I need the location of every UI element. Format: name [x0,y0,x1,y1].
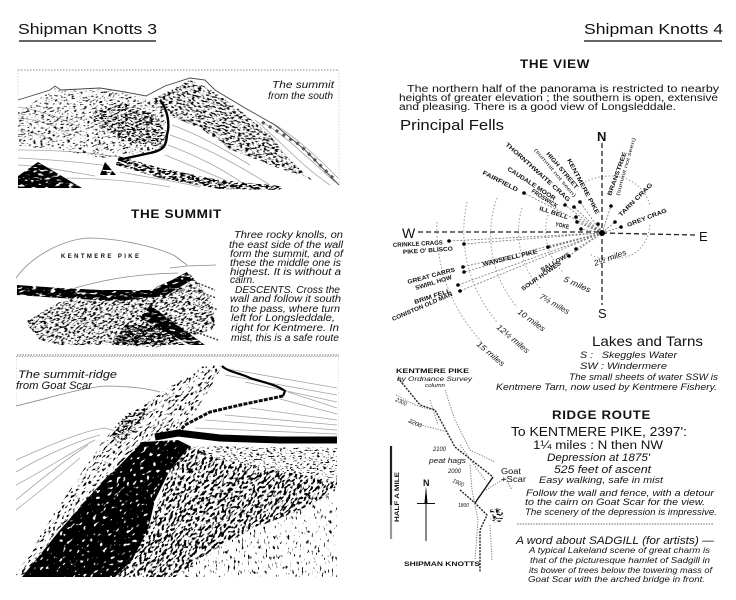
route line [398,378,493,572]
page: right [391,21,723,584]
fell labels [391,137,668,323]
fell labels: (summit not seen) [615,137,638,197]
text block: summit description: left for Longsleddale, [231,313,335,324]
distance labels: 12½ miles [495,323,531,355]
map labels: column [425,383,445,389]
compass axes: W [402,225,416,241]
callout: a word about Sadgill: Goat Scar with the arched bridge in front. [528,574,705,584]
text block: lakes list: The small sheets of water SSW is [569,372,718,383]
map labels: Goat [501,467,522,476]
text block: ridge route details: to the cairn on Goat Scar for the view. [525,497,705,508]
fell labels: FAIRFIELD [481,170,519,194]
text block: ridge route details: Depression at 1875' [547,452,651,464]
map labels: 2100 [432,447,447,453]
map: ridge route [391,369,526,572]
fell labels: FROSWICK [530,189,559,210]
text block: summit description: mist, this is a safe route [231,333,339,344]
map labels: 1800 [458,503,469,509]
heading: The View: THE VIEW [520,57,590,71]
callout: a word about Sadgill: A typical Lakeland scene of great charm is [528,545,711,555]
text block: summit description: Three rocky knolls, on [234,230,343,241]
scale bar [391,446,401,539]
text block: lakes list: S : Skeggles Water [580,350,678,361]
caption: the summit-ridge from Goat Scar: The summit-ridge [18,369,117,381]
text block: ridge route details: Easy walking, safe in mist [539,475,663,486]
text block: summit description: DESCENTS. Cross the [235,285,340,296]
distance labels: 7½ miles [538,292,571,316]
fell labels: (summit not seen) [532,147,577,199]
compass axes: E [699,229,708,244]
fell labels: CAUDALE MOOR [506,167,557,203]
distance labels [475,248,628,368]
chart: radial view diagram [391,129,708,368]
text block: summit description: the east side of the wall [229,240,344,251]
compass axes: S [598,306,607,321]
text block: lakes list: Kentmere Tarn, now used by Kentmere Fishery. [496,382,717,393]
illustration: summit knoll with Kentmere Pike [16,238,339,356]
text block: ridge route details [511,424,717,518]
sight lines [449,193,621,291]
caption: the summit from the south [268,80,335,102]
text block: ridge route details: Follow the wall and fence, with a detour [526,488,715,499]
fell labels: TARN CRAG [618,182,655,218]
fell labels: BRIM FELL [414,288,452,306]
fell labels: SOUR HOWES [521,261,563,293]
fell labels: HIGH STREET [544,151,579,191]
heading: The Summit: THE SUMMIT [131,207,222,221]
fell labels: BRANSTREE [607,151,629,197]
fell labels: GREY CRAG [627,208,668,229]
caption: the summit-ridge from Goat Scar [16,369,117,392]
fell labels: GREAT CARRS [407,267,456,286]
text block: summit description: right for Kentmere. In [231,323,339,334]
map labels: 2000 [447,469,462,475]
heading: Principal Fells: Principal Fells [400,117,504,134]
callout: a word about Sadgill: its bower of trees below the towering mass of [529,565,714,575]
page: left [0,21,344,577]
map labels: peat hags [428,458,467,465]
heading: Lakes and Tarns: Lakes and Tarns [592,333,703,349]
compass axes: N [597,129,606,144]
fell labels: CRINKLE CRAGS [393,240,443,249]
text block: summit description: wall and follow it south [230,294,341,305]
north arrow [417,478,435,541]
distance labels: 5 miles [562,275,592,295]
text block: lakes list [496,350,718,393]
text block: view description: and pleasing. There is a good view of Longsleddale. [399,102,676,113]
fell labels: ILL BELL [538,206,569,221]
text block: ridge route details: 1¼ miles : N then NW [533,440,663,452]
heading: Ridge Route: RIDGE ROUTE [552,408,651,422]
label: Kentmere Pike: KENTMERE PIKE [61,254,139,260]
fell labels: WANSFELL PIKE [482,250,538,268]
callout: a word about Sadgill: A word about SADGILL (for artists) — [515,535,715,547]
text block: view description [399,84,719,113]
scale bar: HALF A MILE [395,472,401,522]
illustration: the summit-ridge from Goat Scar [16,356,339,577]
map labels: KENTMERE PIKE [396,369,469,375]
text block: summit description: to the pass, where turn [230,304,340,315]
compass axes [402,129,708,321]
map labels: 2300 [393,397,408,408]
heading: Shipman Knotts 4: Shipman Knotts 4 [584,21,723,38]
text block: ridge route details: 525 feet of ascent [554,464,652,476]
text block: lakes list: SW : Windermere [580,361,667,372]
caption: the summit from the south: The summit [272,80,335,91]
callout: a word about Sadgill: that of the picturesque hamlet of Sadgill in [530,555,710,565]
heading: Shipman Knotts 3: Shipman Knotts 3 [18,21,157,38]
text block: ridge route details: The scenery of the depression is impressive. [525,507,717,518]
map labels: 2200 [406,418,423,430]
fell markers [447,191,623,293]
map labels: +Scar [501,475,526,484]
text block: view description: heights of greater elevation ; the southern is open, extensive [399,93,719,104]
map labels: by Ordnance Survey [397,376,473,383]
text block: view description: The northern half of the panorama is restricted to nearby [407,84,719,95]
text block: summit description: highest. It is without a [230,267,341,278]
map labels: SHIPMAN KNOTTS [404,562,480,568]
fell labels: CONISTON OLD MAN [391,292,454,323]
illustration: the summit from the south [18,70,340,190]
distance labels: 2½ miles [592,248,628,268]
fell labels: YOKE [555,222,570,231]
distance arcs [437,176,650,342]
fell labels: THORNTHWAITE CRAG [504,142,571,204]
fell labels: PIKE O' BLISCO [403,246,453,256]
map labels: 1900 [451,478,465,489]
text block: summit description: cairn. [230,275,255,286]
fell labels: SALLOWS [540,252,572,274]
fell labels: KENTMERE PIKE [565,158,600,216]
callout: a word about Sadgill [515,535,715,584]
text block: ridge route details: To KENTMERE PIKE, 2397': [511,424,687,439]
text block: summit description [229,230,344,344]
north arrow: N [423,478,430,488]
map labels [393,369,526,568]
fell labels: SWIRL HOW [415,275,453,292]
caption: the summit from the south: from the south [268,91,333,102]
distance labels: 10 miles [516,307,547,333]
text block: summit description: form the summit, and of [230,249,344,260]
text block: summit description: these the middle one is [230,258,341,269]
caption: the summit-ridge from Goat Scar: from Goat Scar [16,380,93,392]
distance labels: 15 miles [475,340,507,368]
